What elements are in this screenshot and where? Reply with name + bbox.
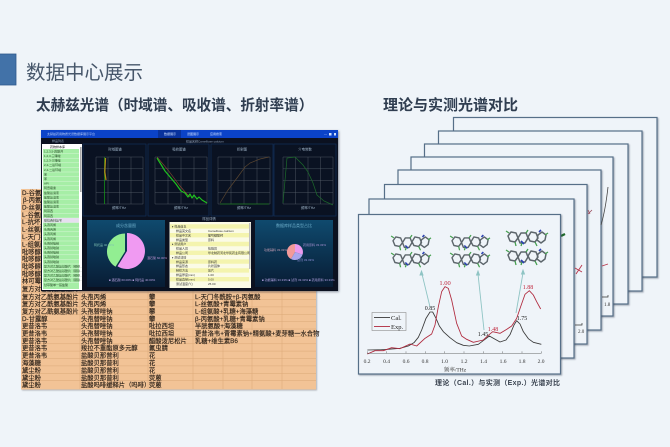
panel: sample spreadsheet: 吡哆醇	[22, 262, 42, 270]
sample info table: 样品类型	[176, 237, 188, 242]
app title bar: —	[324, 132, 327, 136]
panel: sample spreadsheet: 半胱氨酸+海藻糖	[195, 321, 243, 330]
spectrum chart: 2.0	[538, 359, 545, 365]
sample info table: 华北制药河北华民药业有限公司	[208, 250, 250, 255]
chart: refractive spectrum	[211, 144, 273, 216]
sample list sidebar: 1,2,3,5-四酰井	[44, 148, 63, 154]
panel: sample spreadsheet: 吡哆醇	[22, 254, 42, 263]
app title bar: 谱图展示	[187, 131, 199, 136]
spectrum chart: 频率/THz	[444, 366, 467, 374]
sample info table: ▸ 测试详情	[172, 254, 186, 259]
chart: absorption spectrum: 频率/THz	[174, 205, 188, 210]
spectrum chart: 1.00	[439, 280, 451, 287]
chart: composition pie: 酒石酸 60.00%	[147, 255, 167, 260]
sample info table: 片状固体	[208, 263, 220, 268]
panel: sample spreadsheet: 吡拉西坦	[149, 328, 175, 338]
chart: time-domain spectrum: 频率/THz	[112, 205, 126, 210]
panel: sample spreadsheet: 更昔洛韦	[22, 336, 47, 345]
page fragments: peeking curves	[561, 187, 611, 335]
panel: sample spreadsheet: 更昔洛韦	[22, 350, 47, 360]
app title bar: 应用搜索	[210, 131, 222, 136]
panel: sample spreadsheet: 黛尘粉	[22, 366, 42, 374]
panel: sample spreadsheet: 花	[149, 350, 156, 360]
sample list sidebar: 头孢替唑钠	[44, 254, 59, 259]
sample list sidebar: 头孢替唑钠	[44, 259, 59, 264]
panel: sample spreadsheet: 复方对乙酰氨基酚片	[22, 306, 79, 316]
section marker: blue square	[0, 54, 16, 85]
sample list sidebar: 1,2,3-三嗪唑	[44, 158, 61, 163]
panel: sample spreadsheet: 头孢替唑钠	[81, 328, 112, 338]
spectrum chart: 1.75	[517, 316, 527, 322]
app tab label: 样品列表	[52, 138, 64, 143]
panel: sample spreadsheet: 盐酸吗啡缓释片（吗啡）	[81, 380, 150, 389]
panel: sample spreadsheet: 头孢丙烯	[81, 299, 107, 308]
panel: sample spreadsheet: 攀	[149, 306, 156, 316]
panel: sample spreadsheet: 更昔洛韦+青霉素钠+精氨酸+麦芽糖一水合物	[195, 328, 319, 338]
panel: sample spreadsheet: 头孢替唑钠	[81, 306, 112, 316]
sample list sidebar: 头孢丙烯	[44, 222, 56, 227]
sample info table: 1.00	[208, 273, 214, 277]
sample list sidebar: 头孢替唑钠	[44, 240, 59, 245]
chart: dielectric spectrum: 介电常数	[298, 146, 312, 152]
sample list sidebar: 阿莫西	[44, 208, 53, 213]
panel: sample spreadsheet: L-组氨酸	[22, 240, 47, 248]
panel: sample spreadsheet: L-丝氨酸	[22, 224, 47, 234]
sample list sidebar: APl	[44, 182, 49, 186]
panel: sample spreadsheet: 林可霉素	[22, 276, 47, 285]
panel: sample spreadsheet: 黛尘粉	[22, 380, 42, 389]
molecule crystal structures	[391, 230, 548, 267]
panel: sample spreadsheet: L-谷氨酸	[22, 210, 47, 219]
chart: composition pie	[87, 220, 167, 287]
sample info table: 样品详情	[202, 216, 216, 221]
spectrum chart: 1.48	[488, 327, 498, 333]
panel: sample spreadsheet: 荧蒽	[149, 380, 162, 389]
spectrum chart: 0.4	[383, 359, 390, 365]
panel: sample spreadsheet: L-丝氨酸+青霉素钠	[195, 299, 248, 308]
panel: sample spreadsheet: 醋酸泼尼松片	[149, 336, 187, 345]
panel: sample spreadsheet: 复方对乙酰氨基酚片	[22, 292, 79, 301]
sample list sidebar: 复方对乙酰氨基酚片（钢铁…	[44, 273, 83, 278]
sample list sidebar: 头孢丙烯	[44, 231, 56, 236]
sample info table: 样品英文名	[176, 228, 191, 233]
sample info table: ▸ 样品信息	[172, 224, 186, 228]
heading: theory vs measured: 理论与实测光谱对比	[383, 96, 518, 114]
sample list sidebar: 盐酸氨溴索	[44, 199, 59, 204]
sample info table: 样品直径(mm)	[176, 276, 195, 281]
heading: terahertz spectra: 太赫兹光谱（时域谱、吸收谱、折射率谱）	[36, 96, 313, 114]
sample info table: Camelliose calcium	[208, 229, 234, 233]
panel: sample spreadsheet: 盐酸贝那普利	[81, 350, 119, 360]
chart: absorption spectrum: 吸收图谱	[172, 146, 186, 152]
sample list sidebar: 头孢替唑钠	[44, 250, 59, 255]
chart legend	[372, 312, 406, 331]
chart caption: 理论（Cal.）与实测（Exp.）光谱对比	[435, 378, 560, 387]
chart: refractive spectrum: 频率/THz	[237, 205, 251, 210]
page fragments: peeking curves: 2.0	[578, 330, 585, 335]
sample list sidebar: 头孢丙烯	[44, 227, 56, 232]
panel: sample spreadsheet: 更昔洛韦	[22, 328, 47, 338]
panel: sample spreadsheet: 荧蒽	[149, 373, 162, 382]
sample info table: 检验员	[208, 246, 217, 251]
sample info table: 压片	[208, 268, 214, 273]
panel: sample spreadsheet: 羧拉不重酯原多元醇	[81, 343, 138, 352]
sample list sidebar: 甘草酸单一铵盐酸	[44, 282, 68, 287]
chart: category pie: 药用原料 33.33%	[303, 242, 326, 247]
panel: sample spreadsheet: 吡哆醇	[22, 269, 42, 278]
app title bar	[41, 130, 338, 138]
panel: sample spreadsheet: 乳糖+维生素B6	[195, 336, 238, 345]
panel: sample spreadsheet: 黛尘粉	[22, 373, 42, 382]
app title bar: 数据展示	[164, 131, 176, 136]
chart: category pie: ■ 功能辅料 33.33% ■ 试剂 33.33% ■ 药用原料 33.33%	[262, 277, 335, 282]
panel: sample spreadsheet: β-丙氨酸	[23, 195, 48, 204]
chart: dielectric spectrum: 频率/THz	[301, 205, 315, 210]
spectrum chart: 0.2	[364, 359, 371, 365]
panel: sample spreadsheet: D-丝氨酸	[22, 202, 48, 212]
chart legend: Exp.	[391, 324, 403, 331]
sample list sidebar: 盐酸氨溴索	[44, 194, 59, 199]
sample list sidebar: 复方对乙酰氨基酚片（钢铁…	[44, 263, 83, 268]
panel: sample spreadsheet: β-丙氨酸+乳糖+青霉素钠	[195, 314, 265, 323]
spectrum chart: 1.8	[519, 359, 526, 365]
panel: sample spreadsheet: L-抗坏血酸	[22, 217, 53, 226]
sample list sidebar: 阿莫西	[44, 213, 53, 218]
spectrum chart: 1.0	[441, 359, 448, 365]
sample info table: 原料	[208, 237, 214, 242]
panel: sample spreadsheet: 攀	[149, 314, 156, 323]
sample info table: 葡萄糖酸钙	[208, 232, 223, 237]
panel: sample spreadsheet: 更昔洛韦	[22, 321, 47, 330]
spectrum chart: 1.88	[523, 285, 533, 291]
sample info table: 5.00	[208, 277, 214, 281]
sample info table: 制样方法	[176, 268, 188, 273]
panel: sample spreadsheet: 复方对乙酰氨基酚片	[22, 299, 79, 308]
panel: sample spreadsheet: 更昔洛韦	[22, 343, 47, 352]
sample list sidebar: 复方对乙酰氨基酚片（钢铁…	[44, 277, 83, 282]
panel: sample spreadsheet: 氟虫腈	[149, 343, 169, 352]
spectrum chart	[364, 280, 545, 374]
sample info table: 原料药	[208, 259, 217, 264]
sample info table: ▸ 测试用户	[172, 241, 186, 246]
sample info table: 样品公司	[176, 250, 188, 255]
panel: sample spreadsheet: 攀	[149, 292, 156, 301]
chart: dielectric spectrum	[274, 144, 336, 216]
panel: sample spreadsheet: 吡拉西坦	[149, 321, 175, 330]
sample list sidebar: 2,4-二氨环嘧	[44, 162, 61, 167]
panel: sample spreadsheet: 盐酸贝那普利	[81, 366, 119, 374]
panel: sample spreadsheet: 花	[149, 366, 156, 374]
spectrum chart: 1.6	[500, 359, 507, 365]
panel: sample spreadsheet: L-天门冬	[22, 232, 47, 241]
spectrum chart: 1.4	[480, 359, 487, 365]
spectrum chart: 1.2	[461, 359, 468, 365]
panel: sample spreadsheet: L-组氨酸+乳糖+海藻糖	[195, 306, 259, 316]
sample list sidebar: 苯	[44, 176, 47, 181]
panel: sample spreadsheet: L-天门冬酰胺+β-丙氨酸	[195, 292, 261, 301]
sample info table: 样品形态	[176, 263, 188, 268]
panel: sample spreadsheet: D-甘露醇	[22, 314, 48, 323]
chart legend: Cal.	[391, 315, 402, 322]
sample list sidebar	[42, 144, 83, 290]
sample info table	[170, 216, 251, 288]
spectrum chart: 0.6	[403, 359, 410, 365]
sample list sidebar: 哌拉西林氨苄	[44, 218, 62, 222]
chart: time-domain spectrum: 时域图谱	[108, 146, 122, 152]
sample list sidebar: 药物样本库	[50, 144, 65, 149]
panel: sample spreadsheet: 花	[149, 358, 156, 367]
arrows from peaks to molecules	[420, 270, 524, 330]
sample info table: 25.00	[208, 282, 216, 286]
sample list sidebar: 1,2,3-三嗪唑	[44, 153, 61, 158]
spectrum chart: 0.8	[422, 359, 429, 365]
sample info table: 样品人员	[176, 246, 188, 251]
chart: category pie: 试剂 33.33%	[297, 257, 314, 262]
page fragments: peeking curves: 1.8	[604, 303, 611, 308]
sample list sidebar: 盐酸氨溴索	[44, 190, 59, 195]
panel: sample spreadsheet	[21, 188, 319, 390]
chart: composition pie: ■ 酒石酸 60.00% ■ 阿托品 40.00%	[109, 277, 155, 282]
chart: composition pie: 阿托品 40.00%	[94, 242, 114, 247]
chart: category pie: 数据库样品类型占比	[276, 222, 312, 228]
panel: sample spreadsheet: 头孢丙烯	[81, 292, 107, 301]
panel: sample spreadsheet: 吡哆醇	[22, 247, 42, 256]
sample list sidebar: 盐酸氨溴索	[44, 204, 59, 209]
chart: category pie	[255, 220, 335, 287]
sample list sidebar: 头孢丙烯	[44, 236, 56, 241]
panel: front spectrum page	[358, 214, 560, 374]
chart: refractive spectrum: 折射图	[237, 146, 248, 152]
sample info table: 样品来源	[176, 259, 188, 264]
sample info table: 样品厚度(mm)	[176, 272, 195, 277]
chart: category pie: 功能辅料 33.33%	[264, 247, 287, 252]
chart: absorption spectrum	[148, 144, 209, 216]
app title bar: 太赫兹药用物质光谱数据库展示平台	[47, 131, 95, 136]
panel: sample spreadsheet: 盐酸贝那普利	[81, 358, 119, 367]
spectrum chart: 0.85	[425, 306, 435, 312]
sample list sidebar: 2,4-二氨环嘧	[44, 167, 61, 172]
sample info table: 测试温度(℃)	[176, 281, 193, 286]
page title: 数据中心展示	[26, 62, 143, 84]
sample list sidebar: 苯	[44, 171, 47, 176]
sample list sidebar: 复方对乙酰氨基酚片（钢铁…	[44, 268, 83, 273]
chart: time-domain spectrum	[83, 144, 146, 216]
panel: sample spreadsheet: D-谷氨酰胺	[22, 188, 55, 197]
panel: sample spreadsheet: 复方对乙酰氨基酚片	[22, 284, 79, 293]
panel: database app window	[41, 130, 338, 291]
panel: sample spreadsheet: 头孢替唑钠	[81, 314, 112, 323]
panel: sample spreadsheet: 海藻糖	[22, 358, 42, 367]
sample info table: 样品中文名	[176, 232, 191, 237]
panel: stacked spectrum pages	[369, 118, 657, 358]
spectrum chart: 1.45	[478, 332, 488, 338]
panel: sample spreadsheet: 攀	[149, 299, 156, 308]
app sample name label: 样品名称Camelliose calcium	[186, 138, 224, 144]
panel: sample spreadsheet: 头孢替唑钠	[81, 336, 112, 345]
sample list sidebar: 头孢替唑钠	[44, 245, 59, 250]
sample list sidebar: 阿奇霉素	[44, 185, 56, 190]
chart: composition pie: 成分含量图	[116, 222, 136, 228]
panel: sample spreadsheet: 头孢替唑钠	[81, 321, 112, 330]
panel: sample spreadsheet: 盐酸贝那普利	[81, 373, 119, 382]
